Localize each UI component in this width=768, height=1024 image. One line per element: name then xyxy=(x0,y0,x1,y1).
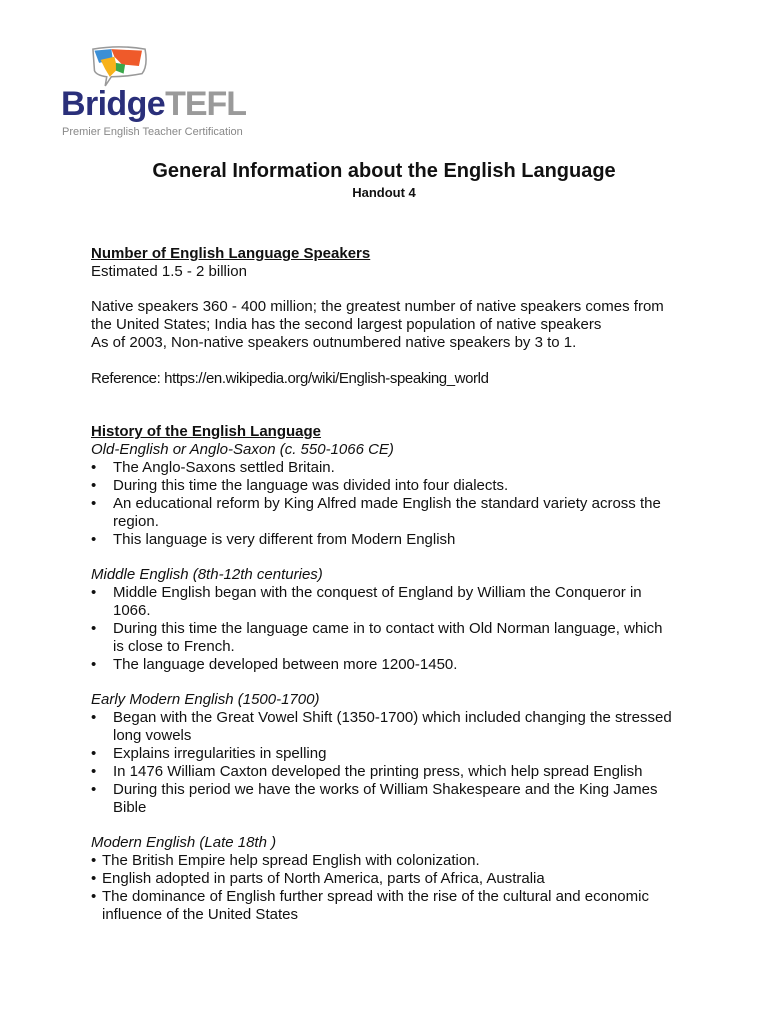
section: early modern english: Bible xyxy=(113,799,146,816)
section: speakers: Native speakers 360 - 400 million; the greatest number of native speakers comes from xyxy=(91,298,664,315)
section: early modern english: In 1476 William Caxton developed the printing press, which help spread English xyxy=(113,763,642,780)
section: middle english: During this time the language came in to contact with Old Norman language, which xyxy=(113,620,662,637)
section: modern english xyxy=(91,834,649,923)
section: middle english: Middle English (8th-12th centuries) xyxy=(91,566,323,583)
section: history old english: The Anglo-Saxons settled Britain. xyxy=(113,459,335,476)
section: speakers xyxy=(91,245,664,387)
section: speakers: Number of English Language Speakers xyxy=(91,245,370,262)
section: speakers: Estimated 1.5 - 2 billion xyxy=(91,263,247,280)
section: history old english: Old-English or Anglo-Saxon (c. 550-1066 CE) xyxy=(91,441,394,458)
section: early modern english: long vowels xyxy=(113,727,191,744)
tagline: Premier English Teacher Certification xyxy=(62,126,243,138)
icon: speech bubble map xyxy=(92,46,147,86)
section: early modern english: During this period we have the works of William Shakespeare and the King James xyxy=(113,781,657,798)
section: speakers: Reference: https://en.wikipedia.org/wiki/English-speaking_world xyxy=(91,370,489,387)
section: early modern english: Began with the Great Vowel Shift (1350-1700) which included changing the stressed xyxy=(113,709,672,726)
section: early modern english xyxy=(91,691,672,816)
section: history old english: region. xyxy=(113,513,159,530)
subtitle: Handout 4 xyxy=(352,185,416,200)
section: middle english: is close to French. xyxy=(113,638,235,655)
section: middle english: Middle English began with the conquest of England by William the Conqueror in xyxy=(113,584,642,601)
section: modern english: English adopted in parts of North America, parts of Africa, Australia xyxy=(102,870,545,887)
section: modern english: Modern English (Late 18th ) xyxy=(91,834,276,851)
section: middle english: The language developed between more 1200-1450. xyxy=(113,656,457,673)
section: modern english: influence of the United States xyxy=(102,906,298,923)
section: history old english: An educational reform by King Alfred made English the standard variety across the xyxy=(113,495,661,512)
section: history old english: History of the English Language xyxy=(91,423,321,440)
section: history old english xyxy=(91,423,661,548)
section: speakers: As of 2003, Non-native speakers outnumbered native speakers by 3 to 1. xyxy=(91,334,576,351)
brand name: BridgeTEFL xyxy=(61,85,246,123)
section: history old english: This language is very different from Modern English xyxy=(113,531,455,548)
section: history old english: During this time the language was divided into four dialects. xyxy=(113,477,508,494)
section: early modern english: Early Modern English (1500-1700) xyxy=(91,691,319,708)
section: early modern english: Explains irregularities in spelling xyxy=(113,745,326,762)
section: speakers: the United States; India has the second largest population of native speakers xyxy=(91,316,601,333)
section: middle english: 1066. xyxy=(113,602,151,619)
section: modern english: The dominance of English further spread with the rise of the cultural and economic xyxy=(102,888,649,905)
section: modern english: The British Empire help spread English with colonization. xyxy=(102,852,480,869)
title: General Information about the English Language xyxy=(152,160,616,182)
section: middle english xyxy=(91,566,662,673)
logo xyxy=(61,46,246,138)
